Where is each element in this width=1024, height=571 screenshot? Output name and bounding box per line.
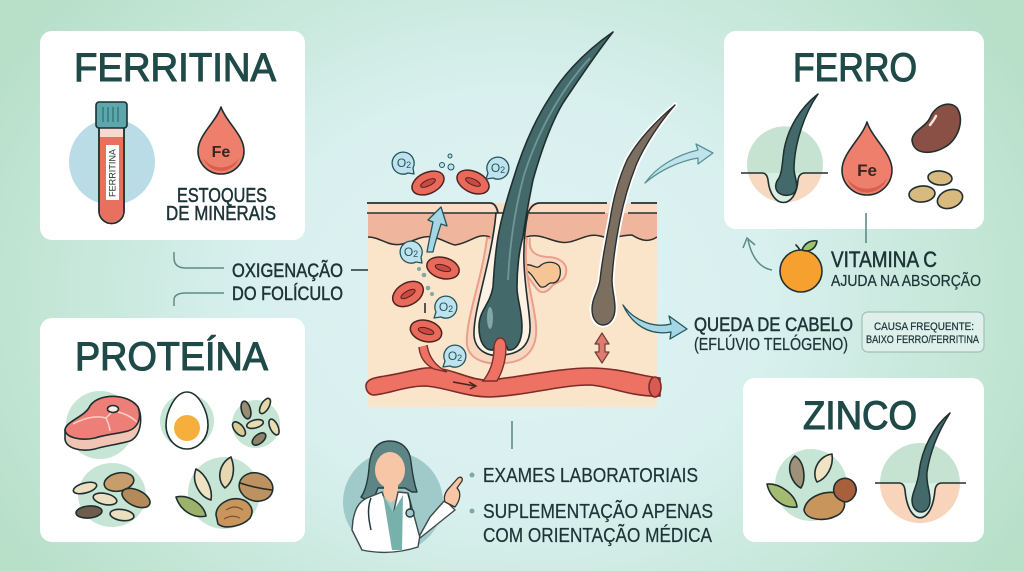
icon: doctor <box>343 441 462 552</box>
panel: ferro <box>724 31 984 229</box>
connector: vitamin c <box>865 213 867 243</box>
icon: test tube <box>69 102 155 223</box>
text: vitamina c <box>831 247 981 290</box>
icon: seeds and nuts <box>767 449 856 521</box>
list: recomendações <box>470 464 713 547</box>
icon: iron drop <box>842 122 892 195</box>
oxygen bubbles: 2 <box>457 353 462 363</box>
icon: iron drop: Fe <box>212 144 230 161</box>
text: queda de cabelo: (EFLÚVIO TELÓGENO) <box>694 333 848 354</box>
oxygen bubbles: O <box>448 349 457 363</box>
arrow: to ferro <box>645 144 713 183</box>
panel: ferritina <box>40 31 305 240</box>
connector: doctor <box>511 421 513 449</box>
oxygen bubbles: 2 <box>500 165 505 175</box>
text: estoques de minerais: ESTOQUES <box>177 185 267 207</box>
icon: beans <box>908 170 965 212</box>
text: queda de cabelo: QUEDA DE CABELO <box>694 314 853 336</box>
icon: test tube: FERRITINA <box>108 148 118 197</box>
text: vitamina c: AJUDA NA ABSORÇÃO <box>831 270 981 290</box>
blood vessel <box>366 368 660 397</box>
heading: proteína: PROTEÍNA <box>75 334 268 379</box>
icon: kidney bean <box>912 104 960 152</box>
oxygen bubbles: O <box>439 300 448 314</box>
oxygen bubbles: O <box>491 161 500 175</box>
arrow: oxygen rising <box>427 207 447 252</box>
heading: ferro: FERRO <box>793 46 917 90</box>
icon: hair follicle <box>741 94 828 202</box>
oxygen bubbles: 2 <box>448 304 453 314</box>
text: vitamina c: VITAMINA C <box>831 247 937 272</box>
icon: orange <box>780 241 822 292</box>
text: queda de cabelo <box>694 314 853 354</box>
double arrow <box>595 333 609 363</box>
icon: iron drop <box>198 107 244 174</box>
icon: seeds <box>230 397 281 448</box>
oxygen bubbles: 2 <box>406 160 411 170</box>
sebaceous gland <box>522 238 566 292</box>
icon: iron drop: Fe <box>857 161 877 180</box>
oxygen bubbles: O <box>397 156 406 170</box>
oxygen bubbles <box>392 152 509 367</box>
callout: causa frequente <box>862 312 984 352</box>
red blood cells <box>388 165 493 345</box>
heading: zinco: ZINCO <box>803 394 917 438</box>
callout: oxigenação do folículo: OXIGENAÇÃO <box>232 260 343 282</box>
callout: causa frequente: BAIXO FERRO/FERRITINA <box>866 334 980 346</box>
list: recomendações: EXAMES LABORATORIAIS <box>483 464 698 487</box>
icon: hair follicle <box>875 413 966 523</box>
oxygen bubbles: 2 <box>413 249 418 259</box>
skin layers <box>368 203 657 407</box>
arrow: vitamin c to ferro <box>743 238 772 270</box>
diagram: skin cross-section <box>366 32 675 407</box>
icon: nuts <box>176 457 276 529</box>
heading: ferritina: FERRITINA <box>74 46 276 90</box>
icon: legumes <box>72 463 153 527</box>
callout: oxigenação do folículo: DO FOLÍCULO <box>232 284 343 305</box>
oxygen bubbles: O <box>404 245 413 259</box>
main hair <box>479 32 613 350</box>
list: recomendações: SUPLEMENTAÇÃO APENAS <box>483 500 713 523</box>
follicle sheath <box>467 238 536 364</box>
panel: zinco <box>743 378 984 542</box>
callout: causa frequente: CAUSA FREQUENTE: <box>874 321 974 333</box>
panel: proteína <box>40 318 305 542</box>
text: estoques de minerais: DE MINERAIS <box>166 203 276 225</box>
icon: egg <box>160 392 214 449</box>
callout: oxigenação do folículo <box>174 252 396 306</box>
icon: meat <box>65 391 141 459</box>
arrow: to hair loss <box>623 305 687 339</box>
list: recomendações: COM ORIENTAÇÃO MÉDICA <box>483 524 712 547</box>
second hair <box>592 105 675 325</box>
